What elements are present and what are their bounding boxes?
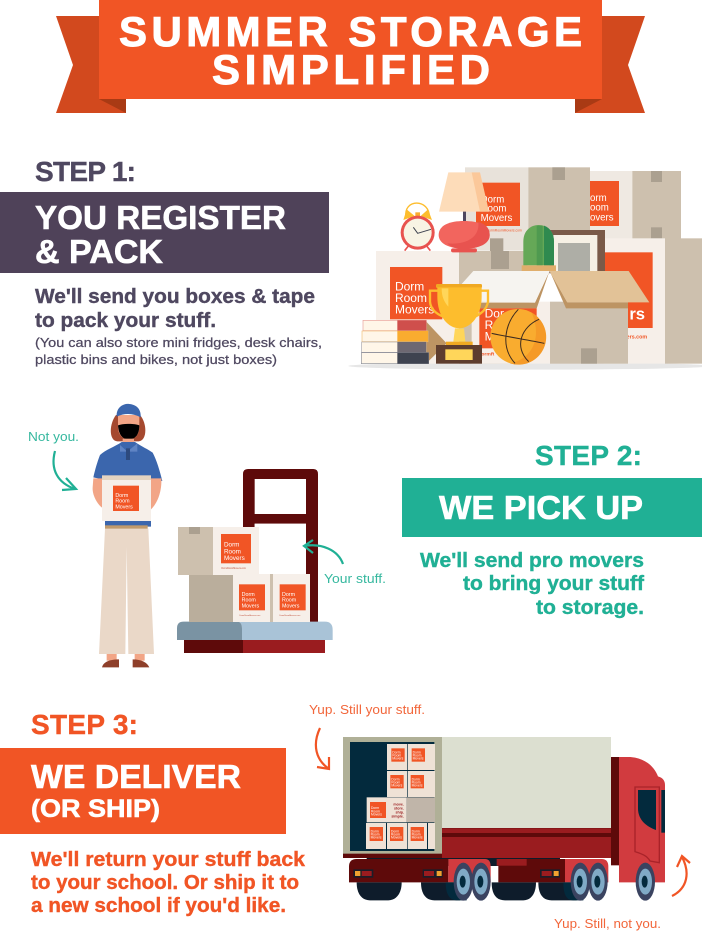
step 2 label: STEP 2: [535,440,642,471]
cargo boxes: Room [371,809,380,813]
annotation: yup still not you: Yup. Still, not you. [554,917,661,931]
annotation: your stuff: Your stuff. [324,571,386,586]
stacked boxes: Movers [242,603,259,609]
stacked boxes [178,527,310,622]
left box: Movers [395,302,434,316]
annotation: yup still your stuff [309,703,425,769]
cargo boxes: Movers [371,835,382,839]
trailer body [343,737,611,858]
icon: basketball [490,309,546,365]
back box left: Movers [481,213,512,224]
truck wheels [357,863,655,901]
annotation: yup still not you [554,856,690,931]
step 3 heading band [0,748,286,834]
cargo boxes: Dorm [413,751,421,755]
cargo boxes: Dorm [391,829,399,833]
stacked boxes: Movers [282,603,300,609]
step 3 heading band: (OR SHIP) [31,795,160,823]
stacked boxes: Dorm [282,592,296,598]
stacked boxes: Dorm [242,592,255,598]
right box: rs [629,304,645,323]
cargo boxes: Movers [413,757,424,761]
illustration: mover holding a box [93,404,333,667]
open cardboard box: ormR [481,352,495,358]
illustration: delivery truck [343,737,665,901]
step 3 description: We'll return your stuff back [31,849,306,871]
right box: ers.com [627,335,647,341]
step 1 heading band [0,192,329,273]
stacked boxes: Dorm [224,542,239,549]
back box right: overs [590,212,614,223]
arrow: to boxes [304,540,343,564]
truck cab [611,757,665,882]
cargo boxes: Room [413,754,422,758]
stacked boxes: Movers [224,555,245,562]
step 2 heading band [402,478,702,537]
cargo boxes: Dorm [412,777,420,781]
step 2 description: to storage. [536,597,644,619]
back box left: Dorm [481,194,504,205]
cargo boxes: Movers [391,835,402,839]
stacked boxes: DormRoomMovers.com [279,614,301,617]
cargo boxes: Dorm [371,806,379,810]
annotation: yup still your stuff: Yup. Still your stuff. [309,703,425,717]
step 3 description: a new school if you'd like. [31,895,286,917]
open cardboard box: Dor [485,306,504,320]
step 2 description: to bring your stuff [463,573,644,595]
annotation: not you [28,429,79,490]
step 1 heading band: YOU REGISTER [35,199,286,236]
cargo boxes: Room [412,832,421,836]
picture frame [549,230,605,273]
stacked boxes: DormRoomMovers.com [239,614,261,617]
step 3 heading band: WE DELIVER [31,758,241,795]
left box: Dorm [395,280,424,294]
back box left: Room [481,204,506,215]
arrow: to trailer [316,728,329,769]
back box right: oom [590,203,609,214]
back box right [590,171,681,239]
illustration: boxes and belongings [348,167,702,370]
open cardboard box: R [485,318,494,332]
left box: Room [395,291,427,305]
cargo boxes: Movers [412,835,423,839]
step 2 description [420,550,644,619]
cargo boxes: Movers [412,783,423,787]
cargo boxes: Movers [392,757,404,761]
open cardboard box [462,271,649,364]
annotation: not you: Not you. [28,429,79,444]
step 3 text block [0,709,306,917]
step 1 description: plastic bins and bikes, not just boxes) [35,352,277,367]
icon: cactus [522,225,556,271]
cargo boxes: Room [391,832,400,836]
carried box: Movers [115,504,133,510]
step 2 text block [402,440,702,619]
annotation: your stuff [304,540,386,586]
carried box: Room [115,499,130,505]
step 1 heading band: & PACK [35,233,163,270]
stacked boxes: Room [224,548,241,555]
hand truck [177,469,333,653]
icon: alarm clock [401,203,435,251]
step 1 label: STEP 1: [35,156,136,187]
left box [376,251,527,364]
step 3 description [31,849,306,917]
back box left [465,167,590,251]
truck chassis [349,858,608,882]
title text: SIMPLIFIED [212,46,490,93]
icon: stack of books [361,320,429,364]
carried box [102,475,151,521]
icon: table lamp [439,172,490,252]
step 1 description: to pack your stuff. [35,310,216,332]
right box [603,238,702,364]
back box left: DormRoomMovers.com [487,228,522,232]
cargo boxes: Room [392,754,401,758]
cargo boxes: simple. [391,815,404,819]
cargo boxes: Room [391,780,400,784]
cargo boxes [366,744,435,849]
step 1 description: We'll send you boxes & tape [35,286,315,308]
step 1 description [35,286,322,367]
cargo boxes: Movers [391,783,403,787]
cargo boxes: Dorm [391,777,400,781]
step 2 description: We'll send pro movers [420,550,644,572]
cargo boxes: store. [394,807,404,811]
cargo boxes: Room [371,832,380,836]
back box right: orm [590,193,607,204]
carried box: Dorm [115,493,129,499]
title text [119,8,582,93]
cargo boxes: Movers [371,813,382,817]
title banner [56,0,645,113]
cargo boxes: Room [412,780,421,784]
arrow: to cab [672,856,690,896]
mover figure [93,404,162,667]
stacked boxes: Room [282,598,297,604]
step 3 description: to your school. Or ship it to [31,872,299,894]
cargo boxes: move. [393,803,404,807]
cargo boxes: ship. [395,811,404,815]
step 2 heading band: WE PICK UP [439,489,643,526]
open cardboard box: M [485,330,495,344]
stacked boxes: DormRoomMovers.com [221,567,246,570]
step 3 label: STEP 3: [31,709,138,740]
step 1 text block [0,156,329,367]
step 1 description: (You can also store mini fridges, desk chairs, [35,335,322,350]
cargo boxes: Dorm [371,829,379,833]
arrow: to mover [54,451,76,490]
title text: SUMMER STORAGE [119,8,582,55]
cargo boxes: Dorm [392,751,401,755]
cargo boxes: Dorm [412,829,420,833]
stacked boxes: Room [242,598,256,604]
icon: trophy [430,284,488,364]
